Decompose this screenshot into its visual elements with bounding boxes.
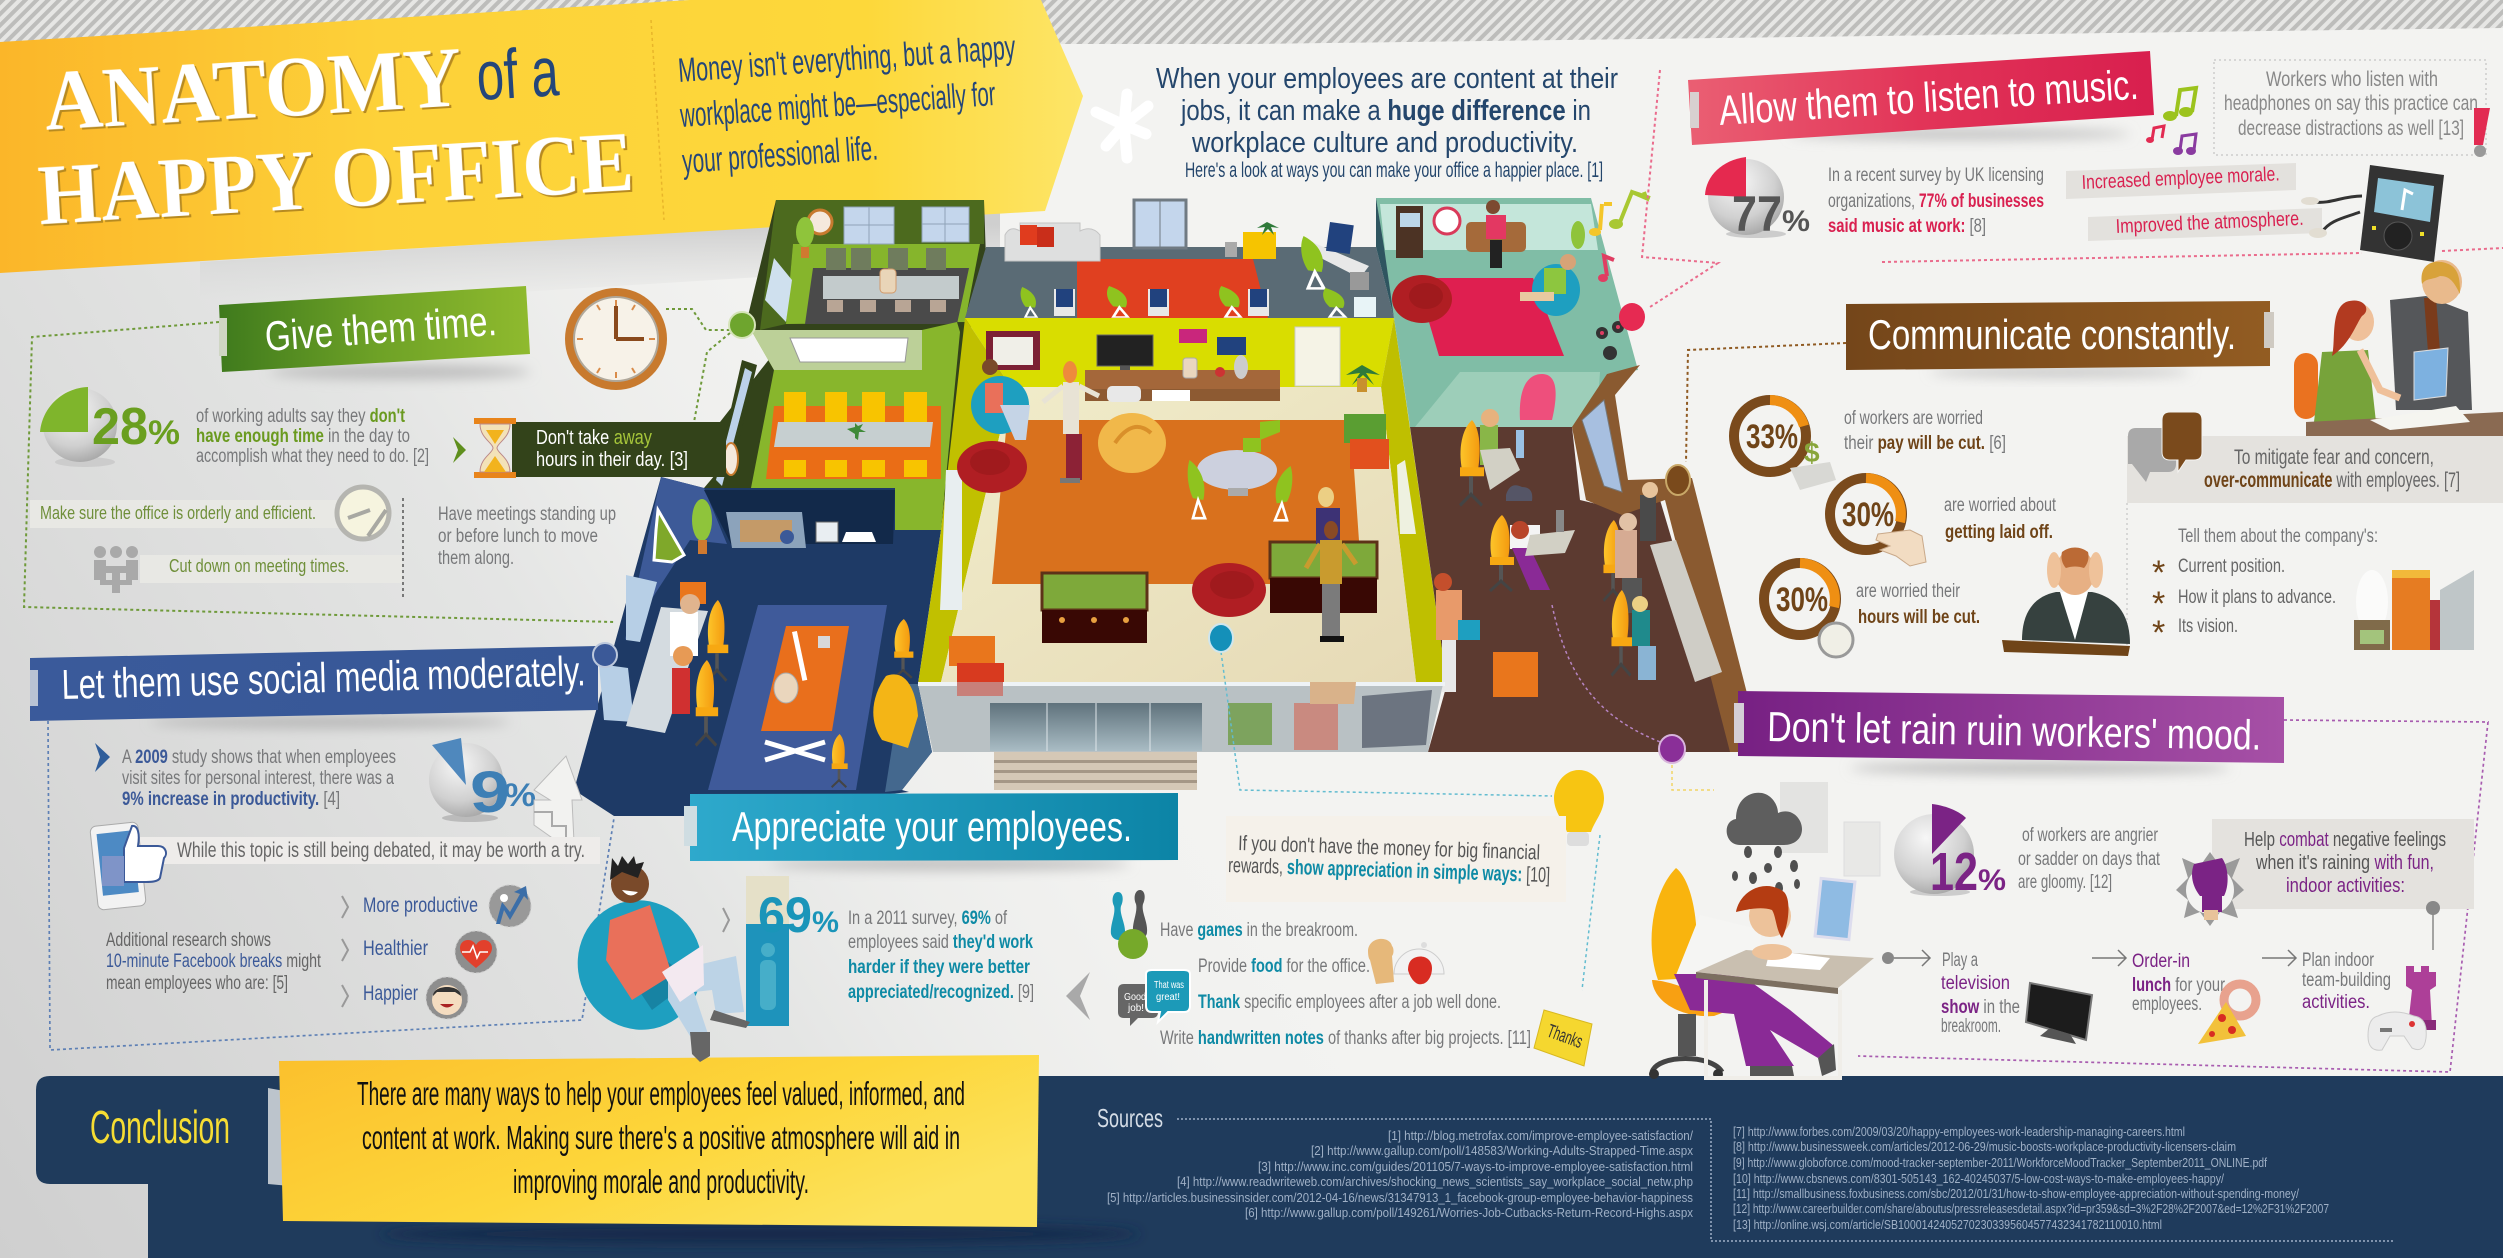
icon: speech bubbles: job!	[1127, 1003, 1144, 1014]
text: team building: team-building	[2302, 970, 2391, 991]
icon: food	[1368, 939, 1444, 984]
arrow	[1066, 972, 1090, 1020]
callout: dark band: Don't take away	[536, 427, 652, 449]
list: tell them	[2152, 526, 2378, 652]
callout box: indoor activities:	[2286, 875, 2405, 897]
list: simple ways: Provide food for the office.	[1198, 956, 1370, 977]
text: additional research: Additional research shows	[106, 930, 271, 951]
stat text	[196, 406, 429, 467]
footer band	[36, 1055, 2503, 1258]
sources list right: [11] http://smallbusiness.foxbusiness.com/sbc/2012/01/31/how-to-show-employee-appreciation-without-spending-money/	[1733, 1186, 2299, 1201]
tip bar	[140, 837, 600, 864]
people in hall	[971, 359, 1356, 642]
top striped band	[0, 0, 2503, 44]
list: simple ways: Thank specific employees after a job well done.	[1198, 992, 1501, 1013]
sources list right	[1733, 1124, 2329, 1232]
intro text: When your employees are content at their	[1156, 63, 1618, 95]
text: tv: Play a	[1942, 950, 1978, 971]
icon: rook and gamepad	[2368, 966, 2436, 1050]
bar chart: 69% figure	[746, 876, 789, 1026]
stat 69%: %	[812, 906, 839, 939]
intro text	[1156, 63, 1618, 182]
stat text	[122, 747, 396, 810]
heading banner	[1688, 51, 2154, 145]
ring 30%	[1830, 478, 1926, 566]
callout box: when it's raining with fun,	[2255, 852, 2434, 874]
info box	[2127, 436, 2503, 503]
sources list left: [4] http://www.readwriteweb.com/archives/shocking_news_scientists_say_workplace_social_netw.php	[1177, 1174, 1693, 1189]
ring 33%: 33%	[1746, 418, 1798, 456]
heading banner	[684, 793, 1178, 861]
stat 69%: 69	[758, 887, 812, 943]
text: standing meetings: or before lunch to move	[438, 526, 598, 547]
icon: happy face	[426, 977, 468, 1019]
dotted connectors	[1221, 652, 1600, 990]
icon: mp3 player	[2301, 165, 2444, 262]
pie 9%	[429, 738, 536, 825]
callout box: If you don't have the money for big financial	[1238, 832, 1540, 864]
info box: To mitigate fear and concern,	[2234, 446, 2434, 469]
panel: social media	[30, 643, 617, 1050]
icon: pizza and donut	[2198, 984, 2256, 1044]
banner subtitle: your professional life.	[681, 129, 879, 181]
building front glass	[918, 682, 1445, 790]
stat text: A 2009 study shows that when employees	[122, 747, 396, 768]
pie 12%: %	[1978, 864, 2006, 897]
stat text: or sadder on days that	[2018, 849, 2161, 870]
sources list left: [2] http://www.gallup.com/poll/148583/Working-Adults-Strapped-Time.aspx	[1311, 1143, 1693, 1158]
pie 28%: %	[148, 414, 180, 452]
list: tell them: *	[2152, 585, 2165, 623]
icon: exclamation	[2474, 108, 2490, 157]
list: benefits: Healthier	[363, 937, 428, 960]
title: of a: of a	[474, 32, 561, 115]
conclusion note: content at work. Making sure there's a positive atmosphere will aid in	[362, 1119, 960, 1156]
list: tell them: Current position.	[2178, 556, 2285, 577]
sources list right: [13] http://online.wsj.com/article/SB10001424052702303395604577432341782110010.html	[1733, 1217, 2162, 1232]
connector	[2426, 901, 2440, 950]
tip bar: meeting times: Cut down on meeting times.	[169, 556, 349, 576]
sources list right: [8] http://www.businessweek.com/articles/2012-06-29/music-boosts-workplace-productivity-licensers-claim	[1733, 1139, 2236, 1154]
panel: music	[1619, 51, 2503, 331]
shadow	[380, 1224, 1140, 1244]
stat text: In a recent survey by UK licensing	[1828, 165, 2044, 186]
sources list left	[1107, 1128, 1693, 1220]
intro text: jobs, it can make a huge difference in	[1180, 95, 1591, 127]
title banner	[0, 0, 1083, 273]
stat text: 9% increase in productivity. [4]	[122, 789, 340, 810]
heading banner	[30, 646, 598, 721]
stat text: In a 2011 survey, 69% of	[848, 908, 1008, 929]
tag: atmosphere: Improved the atmosphere.	[2115, 208, 2304, 238]
heading banner: Appreciate your employees.	[732, 803, 1132, 850]
stat text: of working adults say they don't	[196, 406, 406, 427]
callout: dark band: hours in their day. [3]	[536, 449, 688, 471]
list: benefits: Happier	[363, 982, 418, 1005]
sources list left: [5] http://articles.businessinsider.com/2012-04-16/news/31347913_1_facebook-group-employee-behavior-happiness	[1107, 1190, 1693, 1205]
callout box: headphones	[2214, 60, 2486, 155]
text: lunch: Order-in	[2132, 951, 2190, 972]
pie 12%: 12	[1930, 842, 1978, 902]
heading banner	[219, 286, 530, 372]
ring 30%: 30%	[1842, 496, 1894, 534]
stat text 30 second	[1856, 581, 1980, 628]
ring 30% second	[1764, 563, 1853, 657]
list: benefits	[342, 894, 478, 1007]
tip bar: meeting times	[140, 555, 402, 583]
pie 28%	[40, 387, 180, 467]
room: brown office	[1410, 365, 1762, 752]
icon: wall clock	[565, 288, 667, 390]
tag: atmosphere	[2088, 208, 2322, 241]
stat text 30: are worried about	[1944, 495, 2057, 516]
text: lunch	[2132, 951, 2226, 1015]
stat text	[2018, 825, 2161, 893]
chevron	[453, 437, 466, 463]
icon: stairs arrow	[534, 756, 582, 842]
pie 77%	[1705, 157, 1810, 242]
room: top office	[965, 200, 1394, 318]
stat text 33	[1844, 408, 2006, 454]
room: lounge teal	[1376, 198, 1638, 427]
sources	[1097, 1103, 2393, 1241]
icon: rain cloud	[1727, 782, 1880, 894]
callout box	[1226, 816, 1566, 902]
stat text	[848, 908, 1034, 1003]
list: tell them: Its vision.	[2178, 616, 2238, 637]
stat text	[1828, 165, 2044, 237]
person on beanbag	[561, 856, 750, 1062]
icon: bowling	[1111, 890, 1148, 959]
text: team building: Plan indoor	[2302, 950, 2375, 971]
icon: tv	[2026, 983, 2092, 1044]
sources list right: [10] http://www.cbsnews.com/8301-505143_162-40245037/5-low-cost-ways-to-make-employees-happy/	[1733, 1171, 2224, 1186]
text: additional research	[106, 930, 322, 994]
panel: appreciate your employees	[561, 624, 1604, 1066]
icon: music notes above lounge	[1589, 192, 1650, 282]
stat text 30 second: are worried their	[1856, 581, 1961, 602]
stat text 30: getting laid off.	[1945, 522, 2053, 543]
icon: phone with thumbs up	[90, 822, 166, 910]
icon: speech bubbles	[1118, 970, 1190, 1026]
room: main hall	[918, 318, 1447, 684]
icon: vinyl speakers	[1596, 321, 1624, 360]
sources list left: [3] http://www.inc.com/guides/201105/7-ways-to-improve-employee-satisfaction.html	[1258, 1159, 1693, 1174]
list: simple ways: Have games in the breakroom.	[1160, 920, 1358, 941]
text: additional research: mean employees who are: [5]	[106, 973, 288, 994]
arrow 2	[2092, 950, 2126, 966]
text: tv	[1941, 950, 2020, 1037]
banner subtitle: workplace might be—especially for	[678, 75, 997, 135]
text: team building	[2302, 950, 2391, 1013]
pie 77%: 77	[1732, 186, 1782, 242]
ring 33%: $	[1804, 437, 1820, 468]
banner subtitle: Money isn't everything, but a happy	[677, 28, 1017, 90]
heading banner	[1846, 301, 2274, 370]
text: standing meetings	[438, 504, 616, 569]
pie 9%: 9	[470, 760, 510, 825]
panel: communicate	[1686, 260, 2503, 657]
icon: speech bubbles: Good	[1124, 992, 1146, 1003]
icon: speech bubbles: That was	[1154, 980, 1184, 991]
text: lunch: lunch for your	[2132, 975, 2226, 996]
heading banner: Communicate constantly.	[1868, 311, 2236, 358]
room: green wing	[704, 200, 988, 530]
icon: productive	[489, 885, 531, 927]
intro text: workplace culture and productivity.	[1191, 127, 1578, 159]
couple at computer	[2294, 260, 2503, 436]
icon: boxing glove	[2176, 852, 2244, 926]
chevron	[95, 743, 110, 772]
stat 69%	[758, 887, 839, 943]
list: simple ways: Write handwritten notes of thanks after big projects. [11]	[1160, 1028, 1531, 1049]
node blue	[593, 643, 617, 667]
tag: morale: Increased employee morale.	[2081, 163, 2280, 194]
icon: buildings	[2354, 570, 2474, 650]
text: tv: show in the	[1941, 997, 2020, 1018]
heading banner: Allow them to listen to music.	[1718, 61, 2140, 134]
conclusion note: improving morale and productivity.	[513, 1163, 809, 1200]
icon: speech bubbles	[2128, 412, 2202, 482]
list: benefits: More productive	[363, 894, 478, 917]
tip bar: orderly	[30, 500, 340, 528]
stat text 30 second: hours will be cut.	[1858, 607, 1980, 628]
heading banner: Let them use social media moderately.	[61, 647, 586, 708]
title: anatomy: ANATOMY	[41, 28, 464, 149]
text: additional research: 10-minute Facebook breaks might	[106, 951, 322, 972]
icon: meeting people	[94, 546, 138, 593]
list: simple ways	[1160, 920, 1531, 1049]
worker at desk	[1649, 868, 1874, 1079]
worried man	[2002, 548, 2130, 656]
stat text 33: of workers are worried	[1844, 408, 1983, 429]
heading: conclusion: Conclusion	[90, 1101, 230, 1153]
icon: heart	[455, 931, 497, 973]
heading banner: Give them time.	[263, 297, 498, 360]
ring 33%	[1734, 400, 1836, 490]
sources list right: [9] http://www.globoforce.com/mood-tracker-september-2011/WorkforceMoodTracker_September2011_ONLINE.pdf	[1733, 1155, 2267, 1170]
conclusion note	[279, 1055, 1039, 1227]
stat text: are gloomy. [12]	[2018, 872, 2112, 893]
panel: rain	[1649, 691, 2488, 1079]
stat text: accomplish what they need to do. [2]	[196, 446, 429, 467]
list: tell them: *	[2152, 554, 2165, 592]
list: tell them: How it plans to advance.	[2178, 587, 2336, 608]
pie 77%: %	[1782, 205, 1810, 238]
stat text: of workers are angrier	[2022, 825, 2158, 846]
icon: thanks note	[1534, 1010, 1592, 1066]
tape	[268, 1088, 290, 1186]
sources list right: [12] http://www.careerbuilder.com/share/aboutus/pressreleasesdetail.aspx?id=pr359&sd=3%2F28%2F2007&ed=12%2F31%2F2007	[1733, 1201, 2329, 1216]
callout box	[2212, 819, 2474, 909]
pie 9%: %	[504, 777, 536, 813]
icon: check clock	[337, 487, 389, 539]
stat text 33: their pay will be cut. [6]	[1844, 433, 2006, 454]
stat text: appreciated/recognized. [9]	[848, 982, 1034, 1003]
text: tv: television	[1941, 973, 2010, 994]
list: tell them: Tell them about the company's:	[2178, 526, 2378, 547]
icon: hourglass	[474, 418, 516, 478]
callout box: rewards, show appreciation in simple ways: [10]	[1228, 854, 1550, 887]
stat text: said music at work: [8]	[1828, 216, 1986, 237]
node red	[1619, 303, 1645, 331]
tag: morale	[2066, 163, 2296, 199]
tip bar: orderly: Make sure the office is orderly and efficient.	[40, 503, 316, 523]
pie 28%: 28	[92, 398, 148, 456]
title: happy office: HAPPY OFFICE	[36, 113, 636, 243]
text: team building: activities.	[2302, 992, 2370, 1013]
stat text: organizations, 77% of businesses	[1828, 191, 2044, 212]
list: tell them: *	[2152, 614, 2165, 652]
icon: white asterisk	[1096, 94, 1148, 158]
arrow 1	[1882, 950, 1930, 966]
pie 12%	[1894, 804, 2006, 902]
stat text: have enough time in the day to	[196, 426, 410, 447]
panel: give them time	[24, 286, 755, 622]
text: standing meetings: Have meetings standing up	[438, 504, 616, 525]
stat text 30	[1944, 495, 2057, 543]
callout box: Help combat negative feelings	[2244, 829, 2446, 851]
conclusion note: There are many ways to help your employees feel valued, informed, and	[357, 1075, 965, 1112]
text: tv: breakroom.	[1941, 1016, 2001, 1037]
panel border	[24, 322, 614, 622]
banner subtitle	[677, 28, 1017, 181]
icon: thanks note: Thanks	[1544, 1021, 1585, 1053]
callout: dark band	[512, 422, 726, 477]
intro text: Here's a look at ways you can make your office a happier place. [1]	[1185, 159, 1603, 182]
tip bar: While this topic is still being debated, it may be worth a try.	[177, 839, 585, 862]
sources list left: [6] http://www.gallup.com/poll/149261/Worries-Job-Cutbacks-Return-Record-Highs.aspx	[1245, 1205, 1693, 1220]
text: standing meetings: them along.	[438, 548, 514, 569]
room: blue wing	[574, 477, 941, 816]
icon: light bulb	[1554, 770, 1604, 846]
stat text: employees said they'd work	[848, 932, 1033, 953]
arrow 3	[2262, 950, 2296, 966]
sources list right: [7] http://www.forbes.com/2009/03/20/happy-employees-work-leadership-managing-careers.html	[1733, 1124, 2185, 1139]
floor plan illustration	[574, 192, 1762, 816]
heading banner: Don't let rain ruin workers' mood.	[1767, 703, 2262, 759]
callout box: headphones: Workers who listen with	[2266, 68, 2438, 91]
node teal	[1209, 624, 1233, 652]
sources: Sources	[1097, 1103, 1163, 1133]
stat text: visit sites for personal interest, there was a	[122, 768, 394, 789]
text: lunch: employees.	[2132, 994, 2202, 1015]
node green	[729, 312, 755, 338]
icon: speech bubbles: great!	[1156, 992, 1180, 1003]
sources list left: [1] http://blog.metrofax.com/improve-employee-satisfaction/	[1388, 1128, 1693, 1143]
node purple	[1659, 735, 1685, 763]
stat text: harder if they were better	[848, 957, 1030, 978]
icon: music notes	[2146, 88, 2196, 155]
ring 30% second: 30%	[1776, 581, 1828, 619]
heading banner	[1734, 691, 2284, 763]
